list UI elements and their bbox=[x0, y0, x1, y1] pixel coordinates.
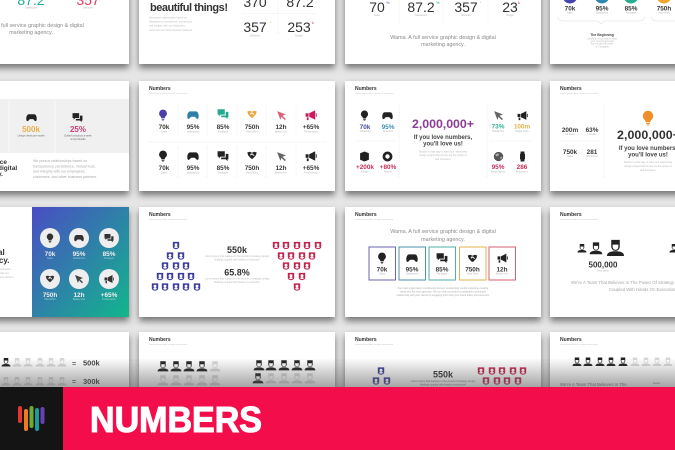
paragraph: ideas with the best agencies. We can help you build a sustainable meaningful bbox=[400, 290, 486, 294]
row 500k: = bbox=[72, 361, 76, 368]
center stats: 65.8% bbox=[224, 268, 250, 278]
icon: lightbulb bbox=[643, 111, 653, 125]
heading bbox=[390, 229, 496, 243]
slide: team row cropped: Lorem ipsum dolor sit amet consectetur bbox=[560, 343, 599, 346]
slide: people rows bbox=[139, 332, 335, 442]
gradient panel bbox=[32, 207, 129, 317]
red people bbox=[478, 367, 526, 385]
slide: grey band with stats bbox=[0, 81, 129, 191]
slide: circles with brace: your next project and bbox=[590, 40, 614, 43]
gradient panel values: 95% bbox=[73, 251, 86, 258]
dark icon row: 750h bbox=[245, 165, 259, 172]
slide: four stats with tagline: % bbox=[436, 0, 440, 5]
slide: gradient panel: ess partners bbox=[0, 276, 15, 279]
red inverted pyramid bbox=[273, 242, 321, 291]
center stats: thinking coupled with hands on execution bbox=[214, 281, 260, 284]
row 300k: = bbox=[72, 379, 76, 386]
dark icon row: Battery Life bbox=[275, 172, 288, 174]
stat boxes bbox=[369, 247, 516, 280]
gradient panel values: 85% bbox=[103, 251, 116, 258]
slide title: Numbers bbox=[355, 86, 377, 92]
slide: four stats with tagline: * bbox=[480, 0, 482, 5]
gradient panel values bbox=[43, 251, 118, 301]
slide: four stats with tagline: Wama. A full service graphic design & digital bbox=[390, 35, 496, 41]
left people bbox=[158, 361, 220, 385]
gradient panel values: Sales bbox=[47, 257, 54, 260]
center headline bbox=[617, 128, 675, 172]
slide: beautiful things bbox=[139, 0, 335, 64]
right people bbox=[253, 360, 315, 383]
center headline: and Company. bbox=[640, 169, 656, 172]
box contents: 95% bbox=[406, 266, 419, 274]
slide: gradient panel bbox=[0, 207, 129, 317]
left number grid: 750k bbox=[563, 149, 578, 156]
slide: beautiful things: Budget bbox=[295, 34, 303, 38]
row 500k: 500k bbox=[83, 358, 101, 368]
center headline: Studio is a fast way to start your responsive bbox=[624, 161, 673, 164]
tagline: We're A Team That Believes In The Power Of Strategy bbox=[571, 280, 675, 285]
slide: grey band with stats: and integrity with our employees, bbox=[33, 170, 86, 174]
slide: six-by-two icon grid bbox=[139, 81, 335, 191]
slide: people rows: Lorem ipsum dolor sit amet consectetur bbox=[149, 343, 188, 346]
dark icon row: Sales bbox=[161, 172, 168, 174]
slide: beautiful things: 357 bbox=[243, 19, 267, 35]
center headline: Studio is a fast way to start your responsive bbox=[419, 150, 468, 154]
slide: four stats with tagline: % bbox=[386, 0, 390, 5]
slide: team row cropped bbox=[550, 332, 675, 442]
left number grid: 281 bbox=[587, 149, 598, 156]
slide: gradient panel: mployees bbox=[0, 268, 11, 271]
left stats: 70k bbox=[360, 124, 371, 131]
slide: circles with brace: The Beginning bbox=[590, 33, 614, 37]
tagline: Coupled With Hands On Execution bbox=[609, 287, 675, 292]
slide: pyramids cropped: Lorem ipsum dolor sit amet consectetur bbox=[355, 343, 394, 346]
slide title: Numbers bbox=[560, 86, 582, 92]
right stats: 100m bbox=[514, 124, 530, 130]
slide: stats row, top left: marketing agency. bbox=[9, 30, 53, 36]
heading: Wama. A full service graphic design & digital bbox=[390, 229, 496, 235]
gradient panel values: Battery Life bbox=[73, 298, 86, 301]
dark icon row: +65% bbox=[303, 165, 320, 172]
slide: circles with brace: homes are the pride bbox=[591, 42, 614, 46]
center headline: design project that homes are the power of bbox=[624, 165, 672, 168]
left number grid: Employees bbox=[586, 155, 599, 158]
slide: grey band with stats: 25% bbox=[70, 125, 86, 134]
blue people bbox=[373, 367, 390, 385]
slide: stats row, top left bbox=[0, 0, 129, 64]
footer band bbox=[0, 387, 675, 450]
box contents: Sales bbox=[379, 272, 386, 276]
slide title: Numbers bbox=[149, 337, 171, 343]
slide: circles with brace: 750h bbox=[657, 6, 671, 12]
tagline bbox=[571, 280, 675, 292]
slide: circles with brace: 85% bbox=[625, 6, 638, 12]
slide: beautiful things: beautiful things! bbox=[150, 2, 228, 14]
gradient panel values: +65% bbox=[101, 292, 118, 299]
slide: circles with brace: of Company bbox=[595, 46, 609, 48]
people icons bbox=[578, 240, 675, 256]
row 300k bbox=[2, 377, 101, 386]
center stat: thinking coupled with hands on execution bbox=[420, 384, 466, 386]
slide: grey band with stats: We pursue relationships based on bbox=[33, 159, 87, 163]
black logo block bbox=[0, 387, 63, 450]
slide title: Numbers bbox=[560, 212, 582, 218]
right stats bbox=[491, 111, 530, 174]
slide title: Numbers bbox=[355, 337, 377, 343]
blue pyramid bbox=[152, 242, 200, 291]
dark icon row: Hard Work bbox=[246, 172, 258, 174]
left stats: +80% bbox=[380, 164, 397, 171]
gradient panel icons bbox=[40, 228, 119, 289]
slide: circles with brace: Hard Work bbox=[658, 12, 670, 14]
slide: beautiful things: and integrity with our employees, bbox=[149, 24, 186, 28]
gradient panel values: 750h bbox=[43, 292, 57, 299]
colored icon row: 70k bbox=[159, 124, 170, 131]
slide: six-by-two icon grid: Lorem ipsum dolor sit amet consectetur bbox=[149, 92, 188, 95]
left number grid: Sales bbox=[567, 155, 574, 158]
dark icon row: 95% bbox=[187, 165, 200, 172]
colored icon row: 750h bbox=[245, 124, 259, 131]
box contents: Battery Life bbox=[496, 272, 509, 276]
paragraph: relationship with your clients by engaging them with your brand today and tomorrow. bbox=[397, 294, 490, 297]
dark icon row: 85% bbox=[217, 165, 230, 172]
center stat: 550k bbox=[433, 370, 454, 380]
left stats: Budget bbox=[361, 170, 369, 174]
colored icon row: Performance bbox=[304, 130, 319, 134]
center stats: thinking coupled with hands on execution bbox=[214, 258, 260, 262]
slide: team 500,000 bbox=[550, 207, 675, 317]
box contents: 85% bbox=[436, 266, 449, 274]
slide: 2,000,000+ with side stats bbox=[345, 81, 541, 191]
colored icon row: +65% bbox=[303, 124, 320, 131]
slide: four stats with tagline: Websites bbox=[461, 14, 472, 17]
tagline: We're A Team That Believes In The bbox=[560, 382, 627, 387]
slide: four stats with tagline: k bbox=[518, 0, 520, 5]
slide: four stats with tagline: Budget bbox=[506, 14, 514, 17]
slide: stats row, top left: Satisfaction bbox=[25, 6, 38, 10]
slide: people equals 500k bbox=[0, 332, 129, 442]
left number grid: 200m bbox=[562, 127, 578, 134]
gradient panel values: Hard Work bbox=[44, 298, 56, 301]
right stats: Employees bbox=[516, 170, 529, 174]
slide: beautiful things: customers and other business partners. bbox=[149, 29, 193, 32]
slide: grey band with stats: customers, and other business partners. bbox=[33, 175, 97, 179]
center headline: design project that homes are the power of bbox=[419, 154, 467, 157]
slide: beautiful things: Websites bbox=[250, 34, 261, 38]
slide: circles with brace: 70k bbox=[565, 6, 576, 12]
slide: pyramids cropped bbox=[345, 332, 541, 442]
center stats: Lorem ipsum that features in the pursuit of strategy design bbox=[205, 255, 270, 258]
box contents: 750h bbox=[465, 266, 480, 274]
slide: circles with brace: 95% bbox=[596, 6, 609, 12]
gradient panel values: Satisfaction bbox=[73, 257, 86, 260]
slide: beautiful things: * bbox=[270, 20, 272, 25]
slide title: Numbers bbox=[355, 212, 377, 218]
slide: circles with brace: Satisfaction bbox=[596, 12, 609, 14]
slide: people pyramids bbox=[139, 207, 335, 317]
heading: marketing agency. bbox=[421, 237, 465, 243]
dark icon row: 70k bbox=[159, 165, 170, 172]
left number grid: Oil Sales bbox=[565, 133, 576, 136]
dark icon row: 12h bbox=[275, 165, 287, 172]
colored icon row: Battery Life bbox=[275, 130, 288, 134]
logo: colored bars bbox=[18, 406, 44, 431]
slide: four stats with tagline: Satisfaction bbox=[415, 14, 428, 17]
slide: circles with brace bbox=[550, 0, 675, 64]
dark icon row: Performance bbox=[304, 172, 319, 174]
slide: beautiful things: 253 bbox=[287, 19, 311, 35]
center stats: Lorem ipsum that features in the pursuit of strategy design bbox=[205, 278, 270, 280]
number: New sales bbox=[597, 270, 609, 272]
gradient panel values: 70k bbox=[45, 251, 56, 258]
row 300k: 300k bbox=[83, 377, 101, 386]
gradient panel values: 12h bbox=[73, 292, 85, 299]
center headline: you'll love us! bbox=[628, 152, 668, 158]
slide: four stats with tagline bbox=[345, 0, 541, 64]
slide: team 500,000: Lorem ipsum dolor sit amet consectetur bbox=[560, 218, 599, 221]
left stats: Workshop bbox=[360, 130, 371, 133]
right stats: 73% bbox=[492, 124, 505, 130]
dark icon row: Satisfaction bbox=[187, 172, 200, 174]
slide: stats row, top left: Websites bbox=[83, 6, 94, 10]
slide: grey band with stats: transparency, persistence, mutual trust, bbox=[33, 164, 96, 168]
slide: people pyramids: Lorem ipsum dolor sit amet consectetur bbox=[149, 218, 188, 221]
slide: five coloured boxes: Lorem ipsum dolor sit amet consectetur bbox=[355, 218, 394, 221]
colored icon row: Hard Work bbox=[246, 130, 258, 134]
left stats: +200k bbox=[356, 164, 374, 171]
paragraph bbox=[397, 287, 490, 297]
left stats: Research bbox=[383, 130, 394, 133]
colored icon row: 85% bbox=[217, 124, 230, 131]
slide: four stats with tagline: Sales bbox=[374, 14, 381, 17]
slide title: Numbers bbox=[149, 86, 171, 92]
dark icon row bbox=[159, 151, 320, 174]
box contents bbox=[377, 253, 509, 276]
dark icon row: Packages bbox=[218, 172, 229, 174]
center headline: 2,000,000+ bbox=[412, 117, 474, 131]
right stats: 286 bbox=[517, 164, 528, 171]
slide: grey band with stats: 500k bbox=[22, 125, 40, 134]
slide: grey band with stats: Dollar's products a week bbox=[64, 134, 92, 138]
center headline: and Company. bbox=[435, 158, 451, 161]
gradient panel values: Packages bbox=[104, 257, 115, 260]
right stats: World Games bbox=[491, 170, 506, 174]
slide title: Numbers bbox=[149, 212, 171, 218]
slide: gradient panel: with our bbox=[0, 272, 9, 275]
paragraph: Our main organization consistently delivers outstanding results marketing creative bbox=[398, 287, 489, 290]
slide: grey band with stats: Unique views per month bbox=[18, 134, 45, 138]
left stats: 95% bbox=[382, 124, 395, 131]
colored icon row: Satisfaction bbox=[187, 130, 200, 134]
left number grid: 63% bbox=[586, 127, 599, 134]
colored icon row: Sales bbox=[161, 130, 168, 134]
slide: 2,000,000+ with side stats: Lorem ipsum dolor sit amet consectetur bbox=[355, 92, 394, 95]
slide: 2,000,000+ with lightbulb bbox=[550, 81, 675, 191]
red title bar bbox=[63, 387, 675, 450]
number: 500,000 bbox=[589, 260, 618, 270]
slide title: Numbers bbox=[560, 337, 582, 343]
box contents: Packages bbox=[437, 272, 448, 276]
left number grid: Increase bbox=[587, 133, 597, 136]
colored icon row: 12h bbox=[275, 124, 287, 131]
row 500k bbox=[2, 358, 101, 368]
slide: beautiful things: transparency, persistence, mutual trust, bbox=[149, 20, 193, 24]
colored icon row: 95% bbox=[187, 124, 200, 131]
center stats: 550k bbox=[227, 245, 248, 255]
slide: circles with brace: Packages bbox=[626, 12, 637, 14]
slide: circles with brace: Studio is a fast way to start bbox=[587, 38, 617, 40]
center headline bbox=[412, 117, 474, 161]
left stats: Planner bbox=[384, 170, 392, 174]
slide: four stats with tagline: marketing agency. bbox=[421, 42, 465, 48]
right stats: 95% bbox=[492, 164, 505, 171]
slide: 2,000,000+ with lightbulb: Lorem ipsum dolor sit amet consectetur bbox=[560, 92, 599, 95]
box contents: Hard Work bbox=[467, 272, 479, 276]
slide: grey band with stats: at top Moodle bbox=[70, 138, 86, 141]
center stats bbox=[205, 245, 270, 284]
right stats: Satisfaction bbox=[492, 130, 505, 133]
box contents: 70k bbox=[377, 266, 388, 274]
slide: team row cropped: Lorem bbox=[653, 382, 660, 385]
slide: beautiful things: We pursue relationships based on bbox=[149, 16, 187, 20]
title: NUMBERS: NUMBERS bbox=[90, 399, 262, 440]
box contents: Satisfaction bbox=[406, 272, 419, 276]
center headline: you'll love us! bbox=[423, 142, 463, 148]
colored icon row: Packages bbox=[218, 130, 229, 134]
left number grid bbox=[562, 127, 599, 158]
right stats: Digital Cash bbox=[516, 130, 529, 133]
lower shading above band bbox=[0, 358, 675, 388]
left stats bbox=[356, 111, 397, 174]
center stat: Lorem ipsum that features in the pursuit of strategy design bbox=[411, 380, 476, 383]
box contents: 12h bbox=[496, 266, 508, 274]
slide: circles with brace: Sales bbox=[567, 12, 574, 14]
center headline: If you love numbers, bbox=[414, 135, 472, 141]
center stat bbox=[411, 370, 476, 386]
gradient panel values: Performance bbox=[102, 298, 117, 301]
slide: beautiful things: k bbox=[312, 20, 314, 25]
slide: five coloured boxes bbox=[345, 207, 541, 317]
colored icon row bbox=[159, 109, 320, 134]
people row bbox=[572, 358, 672, 366]
